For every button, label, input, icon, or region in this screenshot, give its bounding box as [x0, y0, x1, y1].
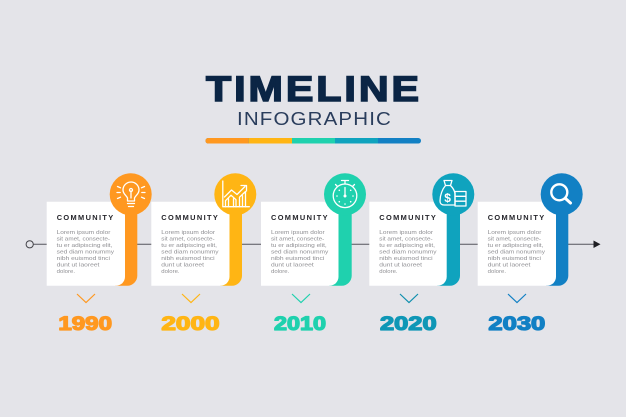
text: 2000 card: sit amet, consecte- — [161, 236, 215, 242]
title — [206, 70, 422, 129]
panel: 2000 — [151, 173, 256, 335]
card: 2020 — [369, 202, 447, 286]
text: 2020 card: nibh euismod tinci — [379, 256, 433, 262]
text: 2010 card: nibh euismod tinci — [271, 256, 324, 262]
text: 2020 card — [379, 213, 437, 275]
text: 2000 card: dunt ut laoreet — [161, 262, 205, 268]
title: TIMELINE — [206, 70, 422, 109]
text: 1990 card: tu er adipiscing elit, — [57, 243, 113, 249]
text: 2010 card — [271, 213, 329, 275]
icon: money bag and coins: $ — [444, 191, 451, 205]
text: 2030 card: sed diam nonummy — [488, 250, 545, 256]
text: 2030 card: dolore. — [488, 269, 506, 275]
stem: 2000 — [220, 190, 242, 286]
text: 1990 card: nibh euismod tinci — [57, 256, 110, 262]
year: 2000: 2000 — [161, 313, 220, 335]
stem: 2010 — [329, 190, 352, 286]
panel: 1990 — [47, 173, 152, 335]
text: 2030 card: COMMUNITY — [488, 213, 544, 222]
circle cap: 1990 — [110, 173, 152, 215]
panel: 2020 — [369, 173, 474, 335]
text: 2020 card: COMMUNITY — [379, 213, 436, 222]
title: INFOGRAPHIC — [237, 109, 392, 129]
chevron: 2000 — [182, 294, 200, 302]
text: 2030 card: dunt ut laoreet — [488, 262, 531, 268]
text: 2020 card: sed diam nonummy — [379, 250, 437, 256]
text: 2030 card: tu er adipiscing elit, — [488, 243, 544, 249]
text: 2020 card: dolore. — [379, 269, 398, 275]
year: 2010: 2010 — [274, 313, 326, 335]
text: 2000 card: sed diam nonummy — [161, 250, 219, 256]
circle cap: 2020 — [432, 173, 474, 215]
year: 2030: 2030 — [488, 313, 545, 335]
text: 2010 card: tu er adipiscing elit, — [271, 243, 327, 249]
card: 1990 — [47, 202, 125, 286]
icon: magnifying glass — [551, 184, 570, 203]
text: 2010 card: dolore. — [271, 269, 290, 275]
text: 2010 card: sit amet, consecte- — [271, 236, 324, 242]
text: 2010 card: sed diam nonummy — [271, 250, 329, 256]
text: 2000 card: Lorem ipsum dolor — [161, 230, 215, 236]
text: 2000 card: nibh euismod tinci — [161, 256, 215, 262]
text: 2000 card — [161, 213, 219, 275]
text: 2020 card: dunt ut laoreet — [379, 262, 423, 268]
icon: stopwatch — [333, 180, 357, 208]
text: 1990 card: sed diam nonummy — [57, 250, 114, 256]
text: 2000 card: tu er adipiscing elit, — [161, 243, 218, 249]
text: 1990 card: sit amet, consecte- — [57, 236, 110, 242]
chevron: 2010 — [292, 294, 310, 302]
text: 2010 card: Lorem ipsum dolor — [271, 230, 325, 236]
panel: 2010 — [261, 173, 366, 335]
panel: 2030 — [478, 173, 583, 335]
icon: light bulb — [117, 182, 145, 206]
text: 2000 card: dolore. — [161, 269, 180, 275]
text: 2030 card: nibh euismod tinci — [488, 256, 541, 262]
text: 1990 card: dolore. — [57, 269, 75, 275]
text: 2020 card: sit amet, consecte- — [379, 236, 433, 242]
text: 1990 card: dunt ut laoreet — [57, 262, 100, 268]
card: 2000 — [151, 202, 230, 286]
circle cap: 2030 — [541, 173, 583, 215]
timeline axis with arrow — [26, 240, 601, 248]
text: 2030 card: Lorem ipsum dolor — [488, 230, 542, 236]
title colour bar — [205, 138, 421, 144]
chevron: 2020 — [400, 294, 418, 302]
card: 2010 — [261, 202, 338, 286]
card: 2030 — [478, 202, 556, 286]
text: 1990 card: Lorem ipsum dolor — [57, 230, 111, 236]
text: 2030 card: sit amet, consecte- — [488, 236, 541, 242]
chevron: 2030 — [508, 294, 526, 302]
stem: 2020 — [437, 190, 460, 286]
stem: 1990 — [115, 190, 137, 286]
text: 1990 card — [57, 213, 114, 275]
text: 2030 card — [488, 213, 545, 275]
icon: growth chart — [223, 181, 249, 207]
chevron: 1990 — [77, 294, 95, 302]
text: 1990 card: COMMUNITY — [57, 213, 113, 222]
text: 2020 card: tu er adipiscing elit, — [379, 243, 436, 249]
text: 2010 card: COMMUNITY — [271, 213, 328, 222]
circle cap: 2010 — [324, 173, 366, 215]
text: 2000 card: COMMUNITY — [161, 213, 218, 222]
year: 2020: 2020 — [380, 313, 437, 335]
circle cap: 2000 — [214, 173, 256, 215]
year: 1990: 1990 — [58, 313, 112, 335]
icon: money bag and coins — [440, 180, 466, 206]
text: 2020 card: Lorem ipsum dolor — [379, 230, 433, 236]
text: 2010 card: dunt ut laoreet — [271, 262, 314, 268]
stem: 2030 — [546, 190, 568, 286]
